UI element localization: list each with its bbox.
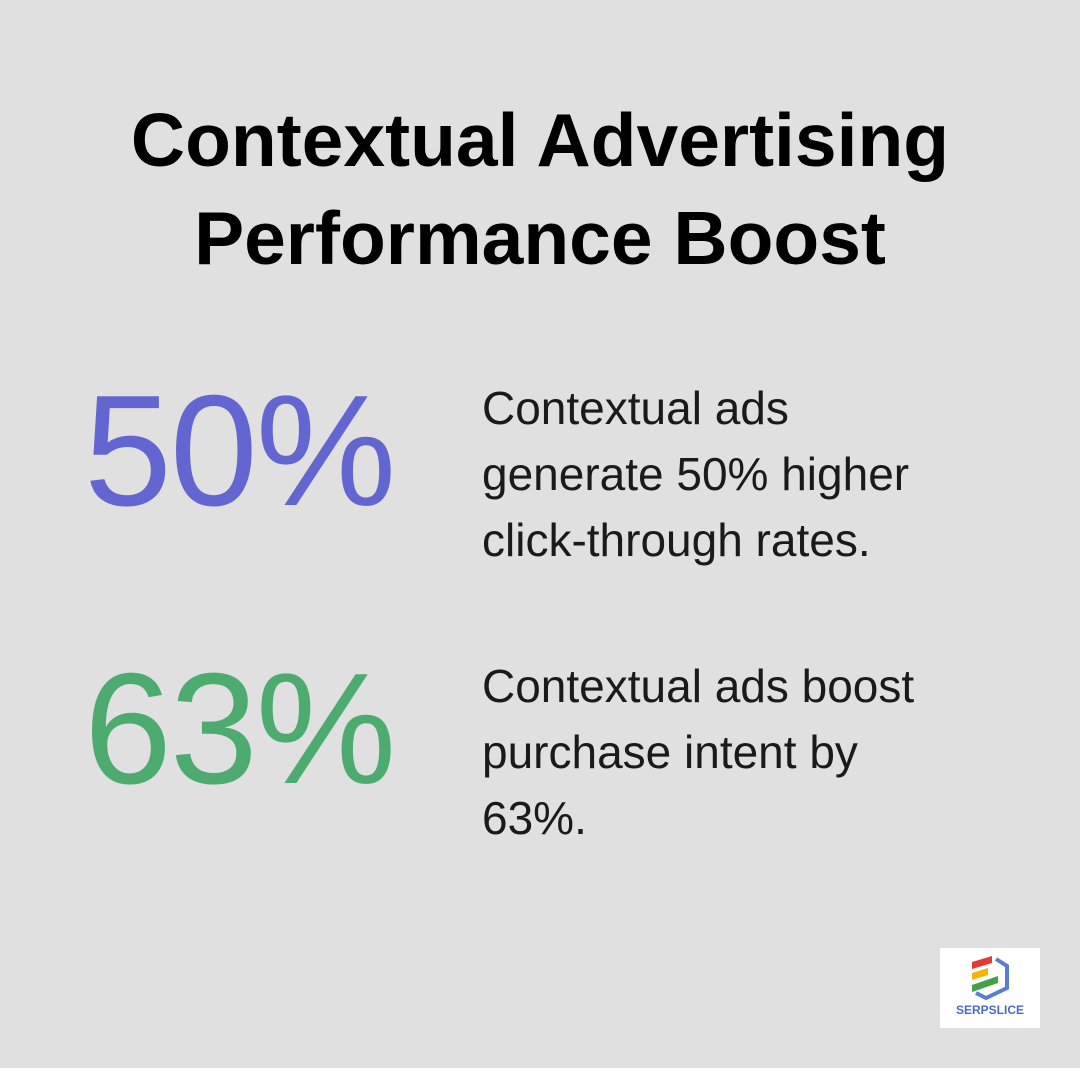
text: stat 1 description: click-through rates.: [482, 514, 871, 566]
stat: 50%: 50%: [84, 363, 394, 539]
title: Performance Boost: [194, 196, 886, 280]
text: stat 2 description: purchase intent by: [482, 726, 858, 778]
logo: serpslice: SERPSLICE: [956, 1003, 1024, 1017]
title: Contextual Advertising: [131, 98, 949, 182]
title: [131, 98, 949, 280]
text: stat 2 description: [482, 660, 914, 844]
text: stat 1 description: [482, 382, 909, 566]
text: stat 2 description: Contextual ads boost: [482, 660, 914, 712]
logo: serpslice: [940, 948, 1040, 1028]
text: stat 2 description: 63%.: [482, 792, 587, 844]
text: stat 1 description: generate 50% higher: [482, 448, 909, 500]
stat: 63%: 63%: [84, 641, 394, 817]
text: stat 1 description: Contextual ads: [482, 382, 789, 434]
